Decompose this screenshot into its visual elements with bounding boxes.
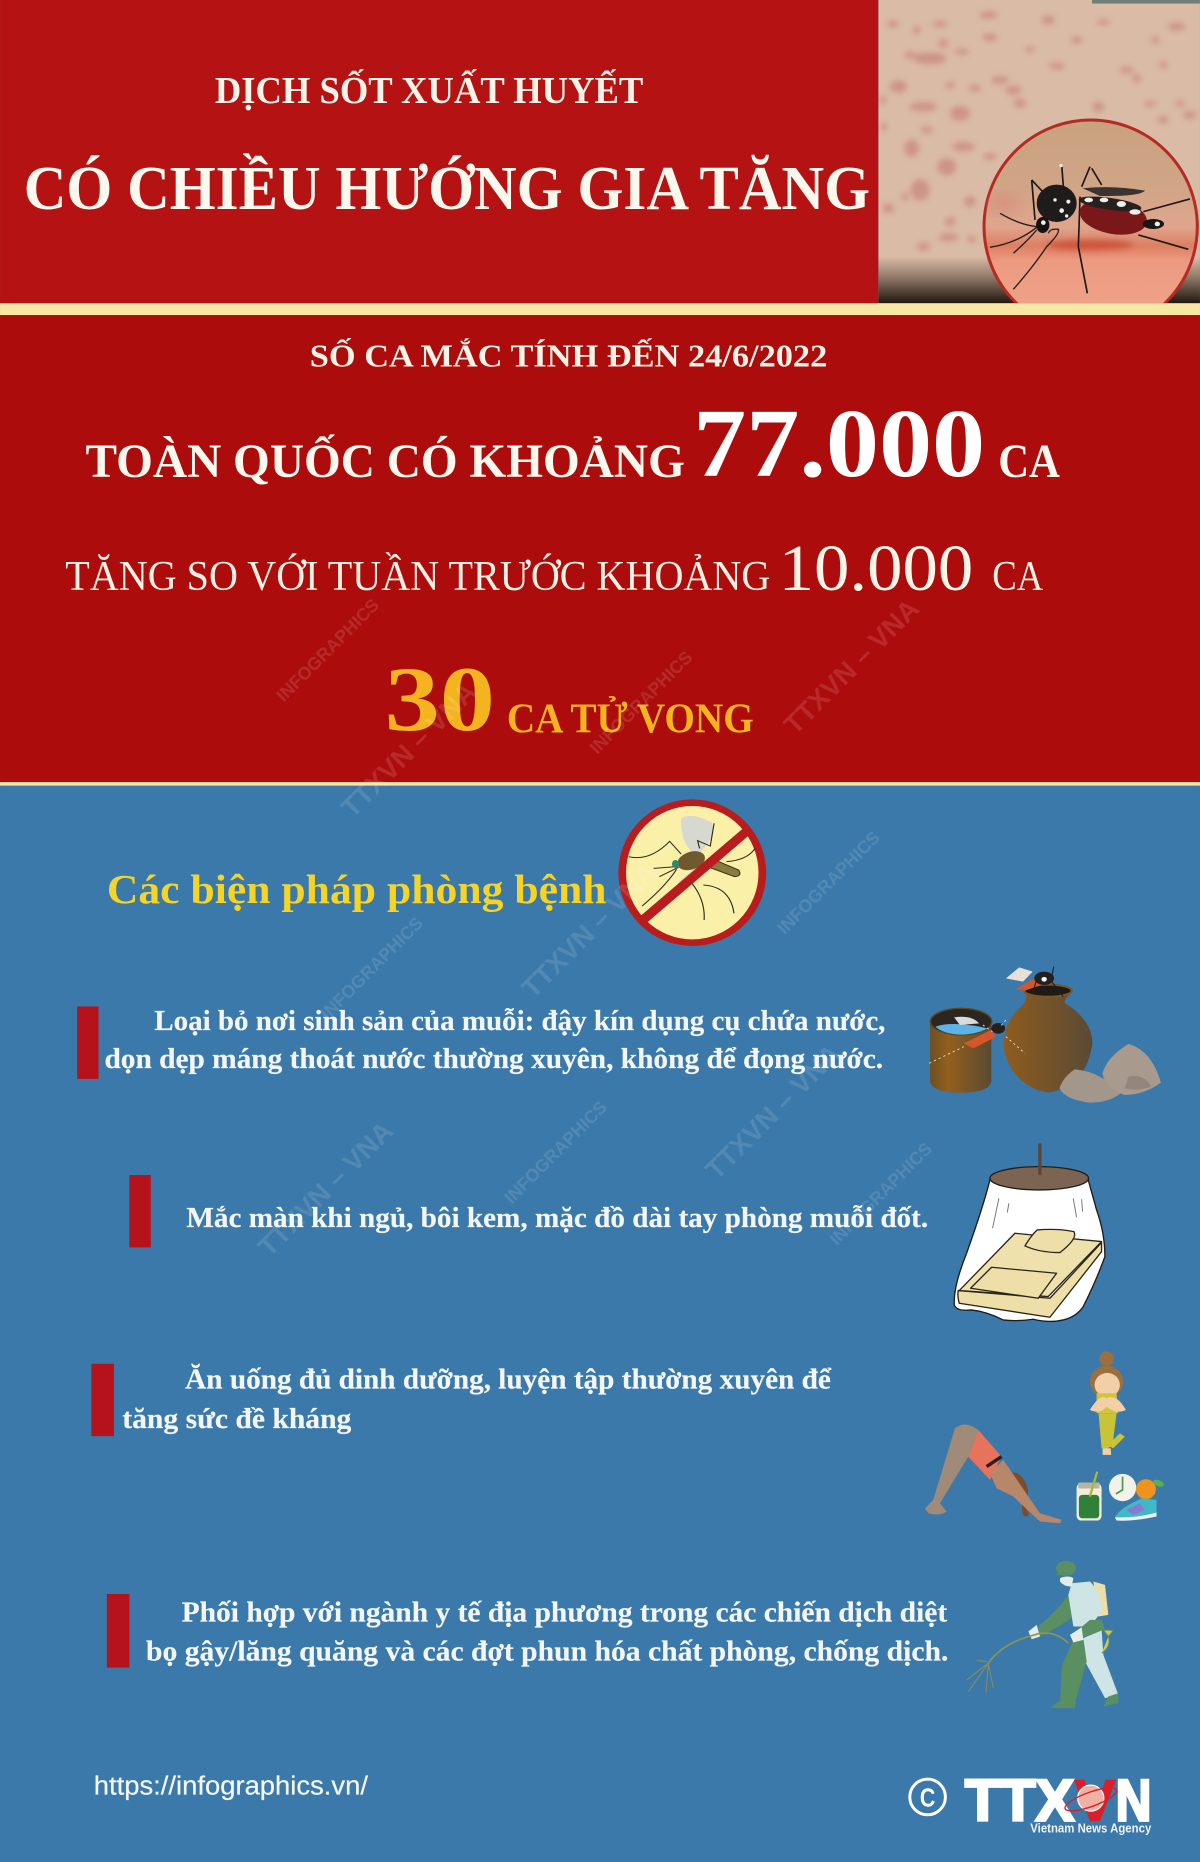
statistic: weekly increase: 10.000 bbox=[779, 533, 973, 605]
panel: header bbox=[0, 0, 878, 304]
measure 4: bọ gậy/lăng quăng và các đợt phun hóa chất phòng, chống dịch. bbox=[146, 1636, 948, 1667]
sneaker bbox=[1115, 1498, 1157, 1520]
watermarks: INFOGRAPHICS bbox=[272, 595, 383, 705]
measure 4 bbox=[107, 1594, 948, 1668]
clock bbox=[1109, 1474, 1136, 1501]
watermarks: TTXVN – VNA bbox=[252, 1115, 399, 1262]
watermarks: INFOGRAPHICS bbox=[316, 913, 427, 1024]
copyright mark bbox=[910, 1779, 945, 1815]
measure 1: dọn dẹp máng thoát nước thường xuyên, không để đọng nước. bbox=[104, 1044, 883, 1075]
measure 3: tăng sức đề kháng bbox=[122, 1404, 351, 1435]
measure 4: Phối hợp với ngành y tế địa phương trong các chiến dịch diệt bbox=[182, 1597, 948, 1628]
statistic: weekly increase: TĂNG SO VỚI TUẦN TRƯỚC KHOẢNG bbox=[65, 552, 770, 600]
panel: case statistics bbox=[0, 315, 1200, 782]
logo: TTXVN: TTX bbox=[965, 1769, 1074, 1834]
logo: TTXVN: N bbox=[1116, 1769, 1151, 1834]
person in downward dog bbox=[925, 1424, 1062, 1523]
icon: no mosquito sign bbox=[622, 803, 762, 943]
statistic: deaths bbox=[385, 649, 754, 751]
girl in tree pose bbox=[1090, 1351, 1126, 1455]
watermarks: TTXVN – VNA bbox=[515, 856, 663, 1004]
measure 1 bbox=[77, 1006, 885, 1079]
logo: TTXVN: V bbox=[1074, 1769, 1116, 1834]
divider band bbox=[0, 303, 1200, 315]
icon: mosquito net over bed bbox=[954, 1143, 1105, 1321]
logo: TTXVN: Vietnam News Agency bbox=[1030, 1822, 1151, 1836]
link: https://infographics.vn/ bbox=[94, 1771, 369, 1801]
watermarks: TTXVN – VNA bbox=[699, 1038, 847, 1185]
watermarks: INFOGRAPHICS bbox=[825, 1138, 936, 1249]
watermarks: TTXVN – VNA bbox=[335, 676, 482, 823]
statistic: national total: CA bbox=[998, 436, 1060, 488]
heading: kicker: DỊCH SỐT XUẤT HUYẾT bbox=[215, 68, 643, 112]
copyright mark: C bbox=[920, 1782, 935, 1812]
panel: prevention measures bbox=[0, 786, 1200, 1862]
statistic: national total: TOÀN QUỐC CÓ KHOẢNG bbox=[85, 435, 685, 488]
statistic: deaths: CA TỬ VONG bbox=[507, 695, 754, 742]
statistic: national total bbox=[85, 390, 1060, 498]
measure 3: Ăn uống đủ dinh dưỡng, luyện tập thường xuyên để bbox=[185, 1363, 832, 1396]
measure 1: Loại bỏ nơi sinh sản của muỗi: đậy kín dụng cụ chứa nước, bbox=[154, 1006, 885, 1037]
statistic: weekly increase: CA bbox=[992, 553, 1043, 600]
statistic: weekly increase bbox=[65, 533, 1043, 605]
photo: skin rash with mosquito bbox=[878, 0, 1200, 333]
juice jar bbox=[1077, 1472, 1102, 1521]
measure 3 bbox=[91, 1363, 832, 1436]
watermarks: INFOGRAPHICS bbox=[500, 1097, 611, 1208]
icon: worker spraying disinfectant bbox=[967, 1561, 1118, 1708]
heading: prevention: Các biện pháp phòng bệnh bbox=[107, 866, 607, 912]
orange bbox=[1136, 1478, 1165, 1499]
title: CÓ CHIỀU HƯỚNG GIA TĂNG bbox=[24, 152, 870, 223]
logo: TTXVN bbox=[910, 1769, 1151, 1836]
statistic: deaths: 30 bbox=[385, 649, 495, 751]
watermarks: TTXVN – VNA bbox=[778, 593, 925, 740]
date line: SỐ CA MẮC TÍNH ĐẾN 24/6/2022 bbox=[310, 338, 827, 374]
mosquito inset circle bbox=[982, 118, 1199, 304]
icon: yoga and healthy lifestyle bbox=[925, 1351, 1165, 1523]
statistic: national total: 77.000 bbox=[693, 390, 985, 498]
watermarks: INFOGRAPHICS bbox=[586, 647, 696, 758]
measure 2: Mắc màn khi ngủ, bôi kem, mặc đồ dài tay phòng muỗi đốt. bbox=[186, 1203, 928, 1234]
watermarks bbox=[252, 593, 936, 1262]
measure 2 bbox=[129, 1175, 928, 1247]
watermarks: INFOGRAPHICS bbox=[773, 827, 884, 938]
icon: water containers with mosquitoes bbox=[929, 967, 1161, 1103]
